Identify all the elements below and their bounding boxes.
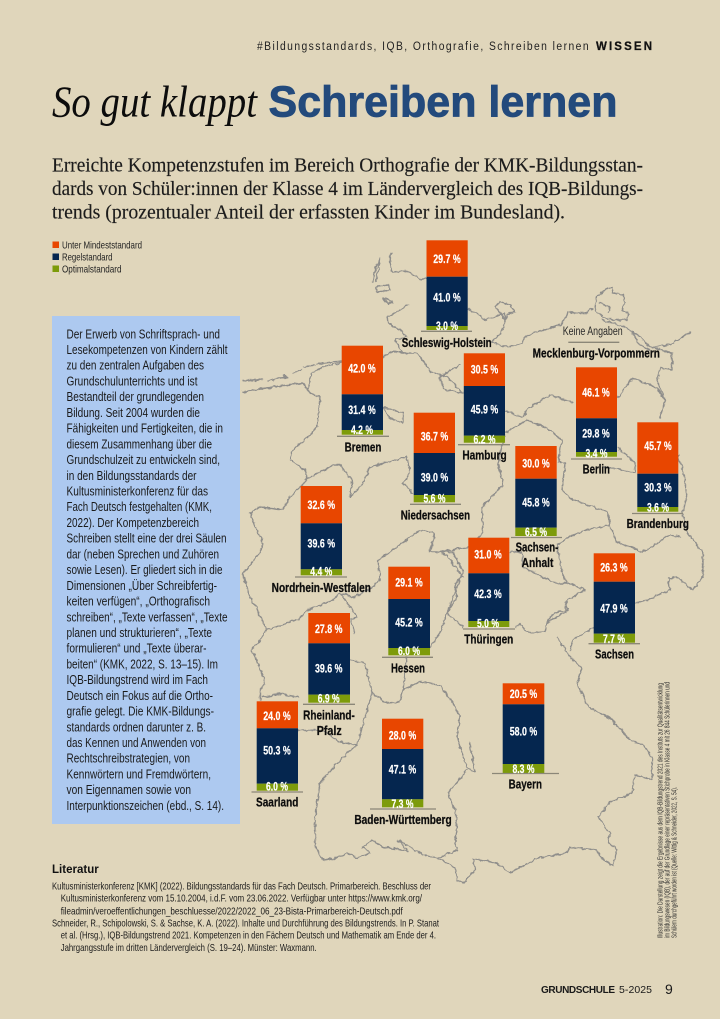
bar: Schleswig-Holstein bbox=[402, 240, 492, 350]
bar: Saarland: 6.0 % bbox=[266, 780, 288, 794]
bar: Brandenburg: 45.7 % bbox=[644, 439, 672, 453]
source note, rotated bbox=[656, 682, 678, 938]
panel: intro text: grafie gelegt. Die KMK-Bildungs- bbox=[66, 705, 214, 719]
title bbox=[52, 78, 618, 126]
bar: Schleswig-Holstein: 41.0 % bbox=[433, 291, 461, 305]
panel: intro text: Kennwörtern und Fremdwörtern, bbox=[66, 768, 211, 782]
literature references: Jahrgangsstufe im dritten Ländervergleich (S. 19–24). Münster: Waxmann. bbox=[61, 943, 317, 954]
bar: Sachsen-Anhalt: Anhalt bbox=[522, 555, 554, 570]
North Frisian coast bbox=[373, 253, 427, 353]
bar: Saarland: 50.3 % bbox=[263, 744, 291, 758]
literature references: Kultusministerkonferenz [KMK] (2022). Bildungsstandards für das Fach Deutsch. Primarbereich. Beschluss der bbox=[52, 881, 431, 892]
panel: intro text: Bildung. Seit 2004 wurden die bbox=[66, 406, 200, 420]
Rheinland-Pfalz, Saarland bbox=[262, 657, 407, 745]
bar: Baden-Württemberg: 47.1 % bbox=[389, 762, 416, 776]
Berlin bbox=[603, 448, 635, 473]
bar: Hamburg: Hamburg bbox=[462, 447, 507, 462]
panel: intro text: Fach Deutsch festgehalten (KMK, bbox=[66, 500, 212, 514]
panel: intro text bbox=[52, 316, 240, 824]
panel: intro text: Grundschulzeit zu entwickeln sind, bbox=[66, 453, 220, 467]
literature references bbox=[52, 864, 439, 954]
panel: intro text: keiten verfügen“, „Orthografisch bbox=[66, 594, 210, 608]
bar: Saarland bbox=[252, 701, 303, 810]
North Sea islands bbox=[243, 361, 341, 381]
bar: Rheinland-Pfalz: 6.9 % bbox=[318, 691, 340, 705]
bar: Schleswig-Holstein: 3.0 % bbox=[436, 319, 458, 333]
footer: 9 bbox=[665, 981, 673, 997]
literature references: Kultusministerkonferenz vom 15.10.2004, i.d.F. vom 23.06.2022. Verfügbar unter https://www.kmk.org/ bbox=[61, 894, 422, 905]
bar: Sachsen bbox=[588, 553, 640, 661]
legend: Unter Mindeststandard bbox=[62, 240, 142, 252]
bar: Sachsen-Anhalt: 6.5 % bbox=[525, 525, 547, 539]
subtitle bbox=[52, 155, 643, 223]
bar: Brandenburg: 3.6 % bbox=[647, 501, 669, 515]
bar: Saarland: Saarland bbox=[256, 795, 298, 810]
page tag line: #Bildungsstandards, IQB, Orthografie, Schreiben lernen bbox=[257, 41, 590, 53]
panel: intro text: Der Erwerb von Schriftsprach- und bbox=[66, 327, 220, 341]
panel: intro text: Rechtschreibstrategien, von bbox=[66, 752, 190, 766]
bar: Baden-Württemberg bbox=[354, 719, 452, 827]
footer bbox=[541, 981, 673, 997]
bar: Hessen bbox=[382, 567, 433, 676]
panel: intro text: Grundschulunterrichts und ist bbox=[66, 374, 198, 388]
label: Mecklenburg-Vorpommern, no data: Mecklenburg-Vorpommern bbox=[533, 345, 660, 360]
bar: Berlin bbox=[571, 367, 622, 476]
bar: Hessen: Hessen bbox=[391, 661, 425, 676]
Nordrhein-Westfalen north and east bbox=[267, 457, 413, 633]
source note, rotated: im Bildungswesen (IQB), der auf der Grundlage einer repräsentativen Stichprobe in Klasse 4 mit 26 844 Schülerinnen und bbox=[662, 682, 672, 938]
bar: Sachsen: 7.7 % bbox=[603, 632, 625, 646]
bar: Niedersachsen: 39.0 % bbox=[421, 471, 448, 485]
bar: Bayern bbox=[492, 683, 559, 791]
label: Mecklenburg-Vorpommern, no data: Keine Angaben bbox=[563, 326, 623, 338]
bar: Rheinland-Pfalz: 39.6 % bbox=[315, 661, 343, 675]
bar: Thüringen: 5.0 % bbox=[477, 616, 499, 630]
bar: Hessen: 29.1 % bbox=[395, 575, 423, 589]
eastern border bbox=[570, 348, 703, 650]
bar: Sachsen: Sachsen bbox=[595, 646, 634, 661]
bar: Rheinland-Pfalz bbox=[303, 613, 355, 738]
bar: Saarland: 24.0 % bbox=[263, 709, 291, 723]
bar: Niedersachsen: 36.7 % bbox=[421, 430, 448, 444]
panel: intro text: Fähigkeiten und Fertigkeiten, die in bbox=[66, 422, 223, 436]
bar: Thüringen: 31.0 % bbox=[474, 547, 502, 561]
Sachsen-Anhalt and Brandenburg border bbox=[468, 420, 610, 583]
label: Mecklenburg-Vorpommern, no data bbox=[533, 326, 660, 360]
bar: Baden-Württemberg: Baden-Württemberg bbox=[354, 812, 452, 827]
panel: intro text: IQB-Bildungstrend wird im Fach bbox=[66, 673, 208, 687]
Baltic coast bbox=[467, 287, 690, 350]
bar: Bremen: 4.2 % bbox=[351, 423, 373, 437]
bar: Niedersachsen bbox=[401, 413, 470, 522]
panel: intro text: das Kennen und Anwenden von bbox=[66, 736, 206, 750]
Mecklenburg and Brandenburg border bbox=[505, 378, 665, 417]
panel: intro text: zu den zentralen Aufgaben des bbox=[66, 359, 204, 373]
title: Schreiben lernen bbox=[268, 78, 618, 126]
source note, rotated: Illustration: Die Darstellung zeigt die Ergebnisse aus dem IQB-Bildungstrend 2021 des Instituts zur Qualitätsentwicklung bbox=[656, 683, 664, 938]
panel: intro text: formulieren“ und „Texte überar- bbox=[66, 642, 206, 656]
bar: Nordrhein-Westfalen: 32.6 % bbox=[308, 498, 335, 512]
panel: intro text: diesem Zusammenhang über die bbox=[66, 437, 212, 451]
subtitle: Erreichte Kompetenzstufen im Bereich Orthografie der KMK-Bildungsstan- bbox=[52, 155, 643, 177]
bar: Hamburg: 45.9 % bbox=[471, 402, 498, 416]
bar: Bremen bbox=[337, 346, 389, 454]
bar: Sachsen-Anhalt: 45.8 % bbox=[522, 495, 550, 509]
panel: intro text: Bestandteil der grundlegenden bbox=[66, 390, 204, 404]
title: So gut klappt bbox=[52, 78, 259, 126]
bar: Brandenburg bbox=[627, 422, 689, 531]
bar: Baden-Württemberg: 7.3 % bbox=[392, 797, 414, 811]
source note, rotated: Schülern durchgeführt worden ist (Quelle: Wittig & Schneider, 2022, S. 54). bbox=[670, 787, 678, 938]
panel: intro text: Schreiben stellt eine der drei Säulen bbox=[66, 532, 226, 546]
bar: Hamburg: 6.2 % bbox=[474, 432, 496, 446]
bar: Nordrhein-Westfalen: 39.6 % bbox=[308, 536, 335, 550]
Bremen area bbox=[383, 407, 403, 423]
bar: Rheinland-Pfalz: 27.8 % bbox=[315, 622, 343, 636]
bar: Schleswig-Holstein: Schleswig-Holstein bbox=[402, 335, 492, 350]
bar: Bremen: 42.0 % bbox=[348, 362, 376, 376]
bar: Sachsen-Anhalt: 30.0 % bbox=[522, 456, 550, 470]
panel: intro text: planen und strukturieren“, „Texte bbox=[66, 626, 212, 640]
bar: Hessen: 6.0 % bbox=[398, 644, 420, 658]
panel: intro text: Deutsch ein Fokus auf die Ortho- bbox=[66, 689, 213, 703]
bar: Berlin: 29.8 % bbox=[582, 426, 610, 440]
bar: Niedersachsen: 5.6 % bbox=[424, 491, 446, 505]
bar: Berlin: 3.4 % bbox=[586, 446, 608, 460]
panel: intro text: standards ordnen darunter z. B. bbox=[66, 720, 206, 734]
panel: intro text: Kultusministerkonferenz für das bbox=[66, 484, 208, 498]
bar: Hamburg: 30.5 % bbox=[471, 362, 498, 376]
page tag line: WISSEN bbox=[596, 41, 652, 53]
bar: Nordrhein-Westfalen: 4.4 % bbox=[310, 564, 333, 578]
bar: Thüringen: 42.3 % bbox=[474, 587, 502, 601]
bar: Sachsen: 47.9 % bbox=[600, 602, 628, 616]
panel: intro text: in den Bildungsstandards der bbox=[66, 469, 196, 483]
footer: 5-2025 bbox=[619, 984, 652, 996]
legend: Regelstandard bbox=[62, 252, 113, 264]
bar: Bremen: 31.4 % bbox=[348, 403, 376, 417]
Bayern east and south bbox=[438, 638, 653, 883]
bar: Bayern: 20.5 % bbox=[510, 687, 537, 701]
literature references: Literatur bbox=[52, 864, 99, 876]
bar: Hamburg bbox=[458, 353, 510, 462]
panel: intro text: beiten“ (KMK, 2022, S. 13–15). Im bbox=[66, 657, 218, 671]
bar: Bayern: 58.0 % bbox=[510, 724, 537, 738]
bar: Rheinland-Pfalz: Rheinland- bbox=[303, 707, 355, 722]
panel: intro text: schreiben“, „Texte verfassen“, „Texte bbox=[66, 610, 228, 624]
Ems and Lower Saxony coast bbox=[242, 352, 463, 700]
subtitle: trends (prozentualer Anteil der erfassten Kinder im Bundesland). bbox=[52, 201, 565, 223]
subtitle: dards von Schüler:innen der Klasse 4 im Ländervergleich des IQB-Bildungs- bbox=[52, 178, 643, 200]
literature references: et al. (Hrsg.), IQB-Bildungstrend 2021. Kompetenzen in den Fächern Deutsch und Mathematik am Ende der 4. bbox=[61, 931, 436, 942]
panel: intro text: dar (neben Sprechen und Zuhören bbox=[66, 547, 219, 561]
bar: Bremen: Bremen bbox=[345, 439, 381, 454]
literature references: Schneider, R., Schipolowski, S. & Sachse, K. A. (2022). Inhalte und Durchführung des Bildungstrends. In P. Stanat bbox=[52, 919, 439, 930]
panel: intro text: von Eigennamen sowie von bbox=[66, 783, 191, 797]
legend: Optimalstandard bbox=[62, 264, 122, 276]
Baden-Württemberg bbox=[315, 682, 475, 860]
panel: intro text: Interpunktionszeichen (ebd., S. 14). bbox=[66, 799, 224, 813]
map of Germany bbox=[242, 253, 703, 883]
legend bbox=[52, 240, 142, 276]
bar: Rheinland-Pfalz: Pfalz bbox=[317, 723, 342, 738]
bar: Nordrhein-Westfalen bbox=[272, 486, 371, 595]
Thüringen west and Hessen bbox=[340, 530, 468, 647]
bar: Thüringen bbox=[463, 538, 515, 646]
bar: Berlin: Berlin bbox=[583, 461, 610, 476]
bar: Thüringen: Thüringen bbox=[464, 631, 513, 646]
bar: Sachsen-Anhalt: Sachsen- bbox=[516, 540, 558, 555]
bar: Brandenburg: 30.3 % bbox=[644, 480, 672, 494]
panel: intro text: Lesekompetenzen von Kindern zählt bbox=[66, 343, 228, 357]
bar: Niedersachsen: Niedersachsen bbox=[401, 507, 470, 522]
panel: intro text: Dimensionen „Über Schreibfertig- bbox=[66, 579, 217, 593]
bar: Sachsen: 26.3 % bbox=[600, 561, 628, 575]
bar: Nordrhein-Westfalen: Nordrhein-Westfalen bbox=[272, 580, 371, 595]
panel: intro text: 2022). Der Kompetenzbereich bbox=[66, 516, 199, 530]
bar: Sachsen-Anhalt bbox=[511, 446, 562, 570]
panel: intro text: sowie Lesen). Er gliedert sich in die bbox=[66, 563, 222, 577]
Sachsen border bbox=[515, 525, 680, 633]
bar: Hessen: 45.2 % bbox=[395, 615, 423, 629]
bar: Bayern: 8.3 % bbox=[512, 762, 535, 776]
footer: GRUNDSCHULE bbox=[541, 985, 615, 996]
bar: Brandenburg: Brandenburg bbox=[627, 516, 689, 531]
bar: Bayern: Bayern bbox=[509, 776, 542, 791]
bar: Schleswig-Holstein: 29.7 % bbox=[433, 252, 461, 266]
literature references: fileadmin/veroeffentlichungen_beschluesse/2022/2022_06_23-Bista-Primarbereich-Deutsch.pdf bbox=[61, 906, 403, 917]
bar: Berlin: 46.1 % bbox=[582, 385, 610, 399]
bar: Baden-Württemberg: 28.0 % bbox=[389, 728, 416, 742]
